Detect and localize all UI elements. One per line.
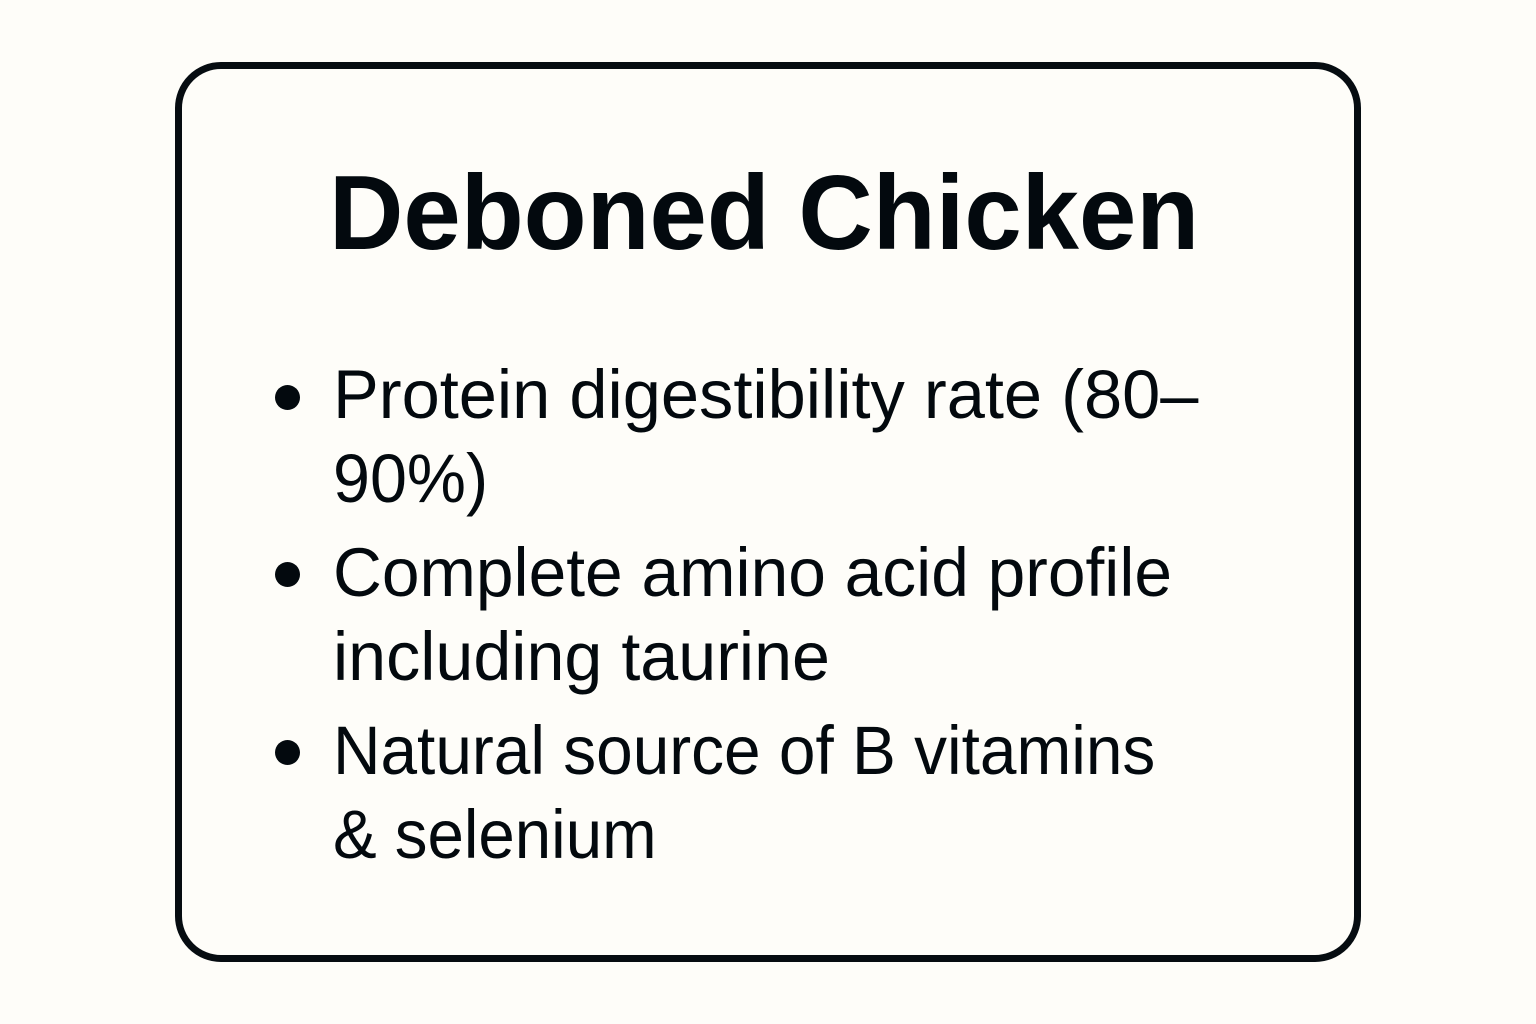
text: vitamins line 2: & selenium [333,796,657,873]
text: protein line 1: Protein digestibility rate (80– [333,356,1198,433]
bullet item: protein digestibility [275,356,1198,517]
text: vitamins line 1: Natural source of B vitamins [333,712,1155,789]
text: amino line 1: Complete amino acid profile [333,534,1172,611]
text: protein line 2: 90%) [333,440,488,517]
icon: bullet [275,740,300,765]
icon: bullet [275,562,300,587]
bullet item: vitamins [275,712,1155,873]
title: Deboned Chicken [329,154,1199,272]
panel: ingredient card [175,62,1361,962]
text: amino line 2: including taurine [333,618,830,695]
icon: bullet [275,385,300,410]
bullet item: amino acid profile [275,534,1172,695]
